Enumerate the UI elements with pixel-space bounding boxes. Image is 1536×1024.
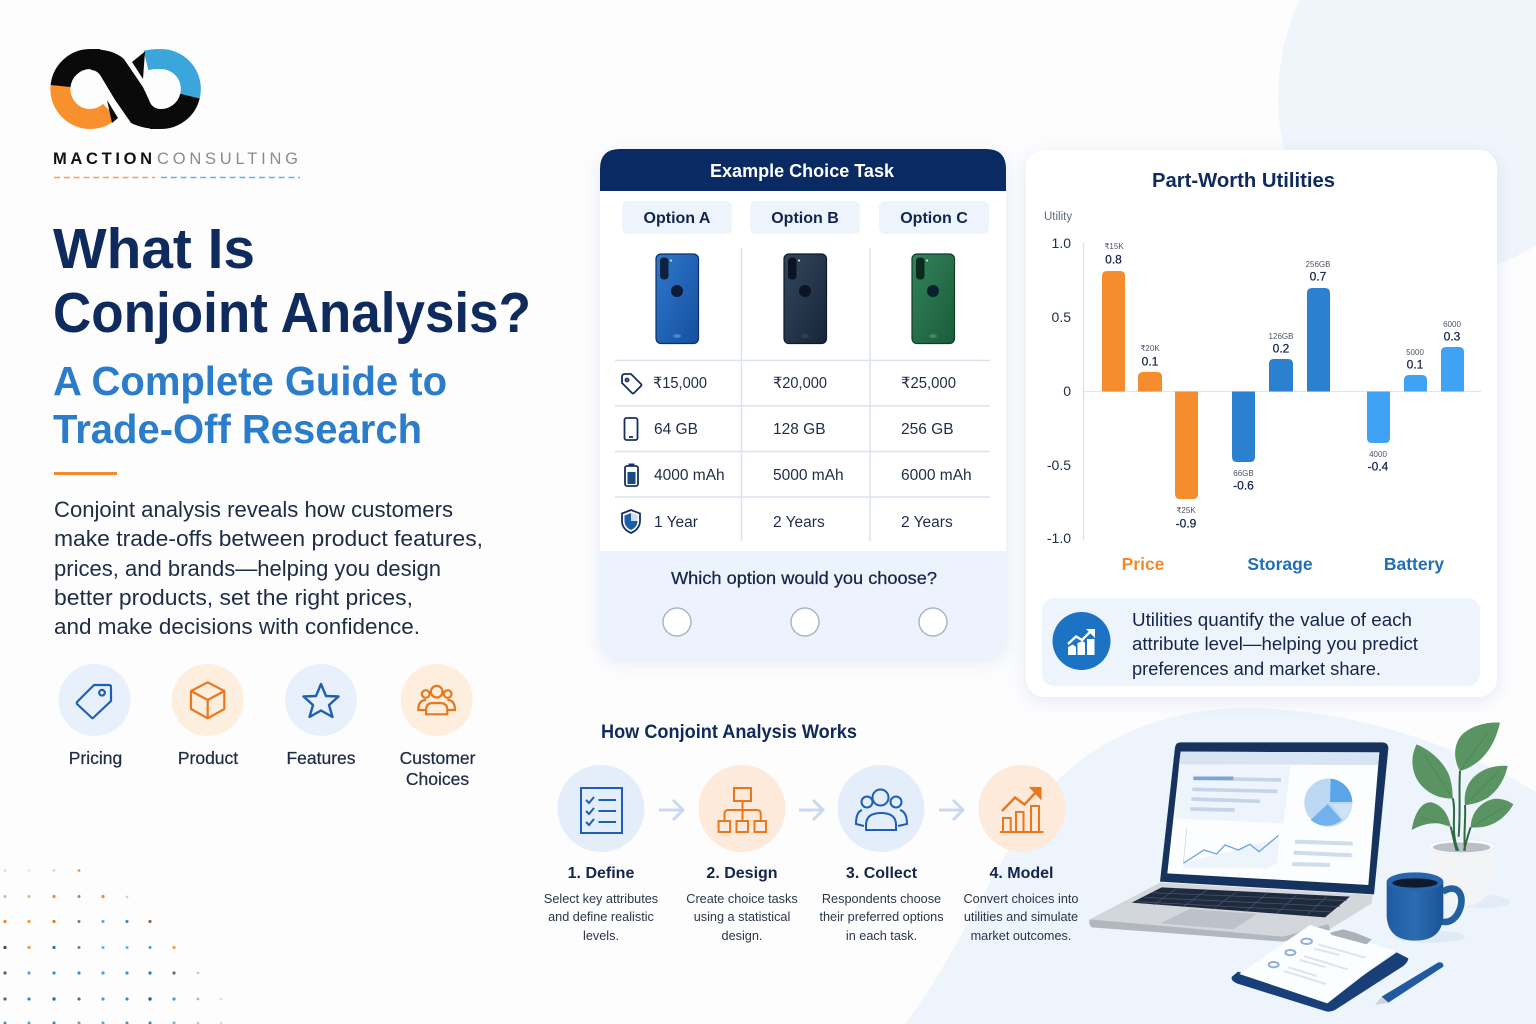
icon: customer choices people (401, 664, 473, 736)
bar chart: -0.9 (1176, 516, 1197, 530)
clipboard (1232, 925, 1408, 1012)
attribute rows: ₹20,000 (773, 375, 827, 392)
icon: model growth chart (978, 765, 1066, 852)
step descriptions: design. (722, 929, 762, 943)
logo wordmark: MACTION (53, 150, 152, 168)
callout text (1132, 609, 1418, 679)
chart category labels: Price (1122, 554, 1165, 574)
panel: part-worth utilities (1026, 150, 1497, 697)
bar chart: 0 (1063, 383, 1071, 399)
bar chart: 4000 (1369, 450, 1387, 459)
step titles: 3. Collect (846, 865, 918, 882)
panel header (600, 149, 1006, 191)
pen (1375, 962, 1443, 1005)
phone: option C green (912, 254, 954, 344)
logo mark: infinity (60, 45, 191, 129)
chart category labels (1122, 554, 1444, 574)
option headers: Option A (644, 210, 711, 227)
intro paragraph: prices, and brands—helping you design (54, 556, 441, 581)
callout (1042, 598, 1480, 686)
chart title: Part-Worth Utilities (1152, 170, 1335, 192)
option headers (622, 201, 989, 234)
bar chart: ₹25K (1176, 506, 1196, 515)
intro paragraph (54, 497, 483, 639)
step descriptions (544, 892, 1078, 943)
step descriptions: levels. (583, 929, 619, 943)
icon labels (69, 748, 476, 789)
illustration: desk scene (1089, 722, 1513, 1012)
bar chart: 0.3 (1444, 330, 1461, 344)
step descriptions: utilities and simulate (964, 910, 1078, 924)
chart category labels: Battery (1384, 554, 1444, 574)
intro paragraph: better products, set the right prices, (54, 585, 413, 610)
attribute rows: 256 GB (901, 421, 954, 438)
section heading: How Conjoint Analysis Works (601, 722, 857, 743)
step descriptions: their preferred options (819, 910, 944, 924)
bar chart: ₹15K (1104, 242, 1124, 251)
attribute rows: 6000 mAh (901, 467, 972, 484)
title (53, 217, 531, 345)
decorative dot grid (3, 869, 222, 1024)
plant pot (1428, 839, 1510, 908)
laptop screen (1160, 742, 1388, 894)
title: What Is (53, 217, 255, 281)
bar chart: ₹20K (1140, 344, 1160, 353)
logo: Maction Consulting: CONSULTING (157, 150, 298, 168)
bar chart: 0.5 (1052, 309, 1071, 325)
attribute rows: ₹15,000 (653, 375, 707, 392)
title: Conjoint Analysis? (53, 281, 531, 345)
attribute rows: 128 GB (773, 421, 826, 438)
bar chart: 1.0 (1052, 235, 1071, 251)
icon: battery row (625, 464, 638, 486)
icon: design hierarchy (698, 765, 786, 852)
icon labels: Features (286, 748, 356, 768)
bar chart: 5000 (1406, 348, 1424, 357)
step titles (568, 865, 1054, 882)
panel header: Example Choice Task (710, 161, 895, 181)
step descriptions: using a statistical (694, 910, 790, 924)
section: how conjoint analysis works (544, 722, 1078, 943)
option headers: Option C (900, 210, 968, 227)
option headers: Option B (771, 210, 839, 227)
step descriptions: market outcomes. (971, 929, 1071, 943)
bar chart: 0.2 (1273, 342, 1290, 356)
attribute rows: 5000 mAh (773, 467, 844, 484)
callout text: attribute level—helping you predict (1132, 633, 1418, 654)
step titles: 2. Design (706, 865, 778, 882)
icon: pricing tag (58, 664, 130, 736)
bar chart: -0.5 (1047, 457, 1071, 473)
step descriptions: Create choice tasks (686, 892, 798, 906)
panel: example choice task (600, 149, 1006, 658)
bar chart: -0.4 (1368, 460, 1389, 474)
icon: define checklist (558, 765, 644, 852)
bar chart: 0.1 (1407, 358, 1424, 372)
step descriptions: Convert choices into (964, 892, 1078, 906)
bar chart: 126GB (1269, 332, 1293, 341)
icon: collect respondents (838, 765, 924, 852)
attribute rows: 4000 mAh (654, 467, 725, 484)
bar chart: 0.1 (1142, 354, 1159, 368)
bar chart: -0.6 (1233, 478, 1254, 492)
icon labels: Product (178, 748, 238, 768)
laptop base (1089, 883, 1373, 942)
coffee mug (1387, 872, 1465, 943)
attribute rows: 1 Year (654, 514, 698, 531)
step titles: 1. Define (568, 865, 634, 882)
icon: price tag row (622, 374, 642, 394)
arrow (939, 800, 963, 820)
attribute rows: ₹25,000 (901, 375, 956, 392)
attribute rows: 64 GB (654, 421, 698, 438)
intro paragraph: Conjoint analysis reveals how customers (54, 497, 453, 522)
subtitle: A Complete Guide to (53, 358, 447, 404)
question footer (600, 551, 1006, 658)
bar chart: 0.8 (1105, 252, 1122, 266)
step descriptions: and define realistic (548, 910, 655, 924)
icon: features star (285, 664, 357, 736)
chart category labels: Storage (1247, 554, 1313, 574)
arrow (799, 800, 823, 820)
attribute rows: 2 Years (773, 514, 825, 531)
callout text: preferences and market share. (1132, 658, 1381, 679)
bar chart: 256GB (1306, 260, 1330, 269)
phone: option B dark (784, 254, 826, 344)
step descriptions: in each task. (846, 929, 917, 943)
laptop pie chart (1304, 779, 1352, 827)
bar chart: 0.7 (1310, 270, 1327, 284)
bar chart: 6000 (1443, 320, 1461, 329)
attribute rows (653, 375, 972, 531)
step descriptions: Respondents choose (822, 892, 941, 906)
subtitle (53, 358, 447, 452)
intro paragraph: and make decisions with confidence. (54, 614, 420, 639)
icon: warranty shield row (622, 510, 640, 533)
step descriptions: Select key attributes (544, 892, 658, 906)
icon: product box (172, 664, 244, 736)
step titles: 4. Model (989, 865, 1054, 882)
bar chart: 66GB (1233, 469, 1254, 478)
icon: growth chart badge (1052, 612, 1110, 670)
icon labels: Choices (406, 769, 469, 789)
phone: option A blue (656, 254, 698, 344)
icon labels: Customer (400, 748, 476, 768)
intro paragraph: make trade-offs between product features, (54, 526, 483, 551)
logo: Maction Consulting (53, 45, 300, 178)
icon labels: Pricing (69, 748, 122, 768)
callout text: Utilities quantify the value of each (1132, 609, 1412, 630)
feature icons row (58, 664, 476, 789)
attribute rows: 2 Years (901, 514, 953, 531)
question footer: Which option would you choose? (671, 568, 937, 588)
subtitle: Trade-Off Research (53, 406, 422, 452)
bar chart (1044, 211, 1481, 546)
icon: storage phone row (624, 418, 638, 440)
plant leaves (1412, 722, 1513, 851)
arrow (659, 800, 683, 820)
bar chart: Utility (1044, 211, 1072, 223)
bar chart: -1.0 (1047, 530, 1071, 546)
